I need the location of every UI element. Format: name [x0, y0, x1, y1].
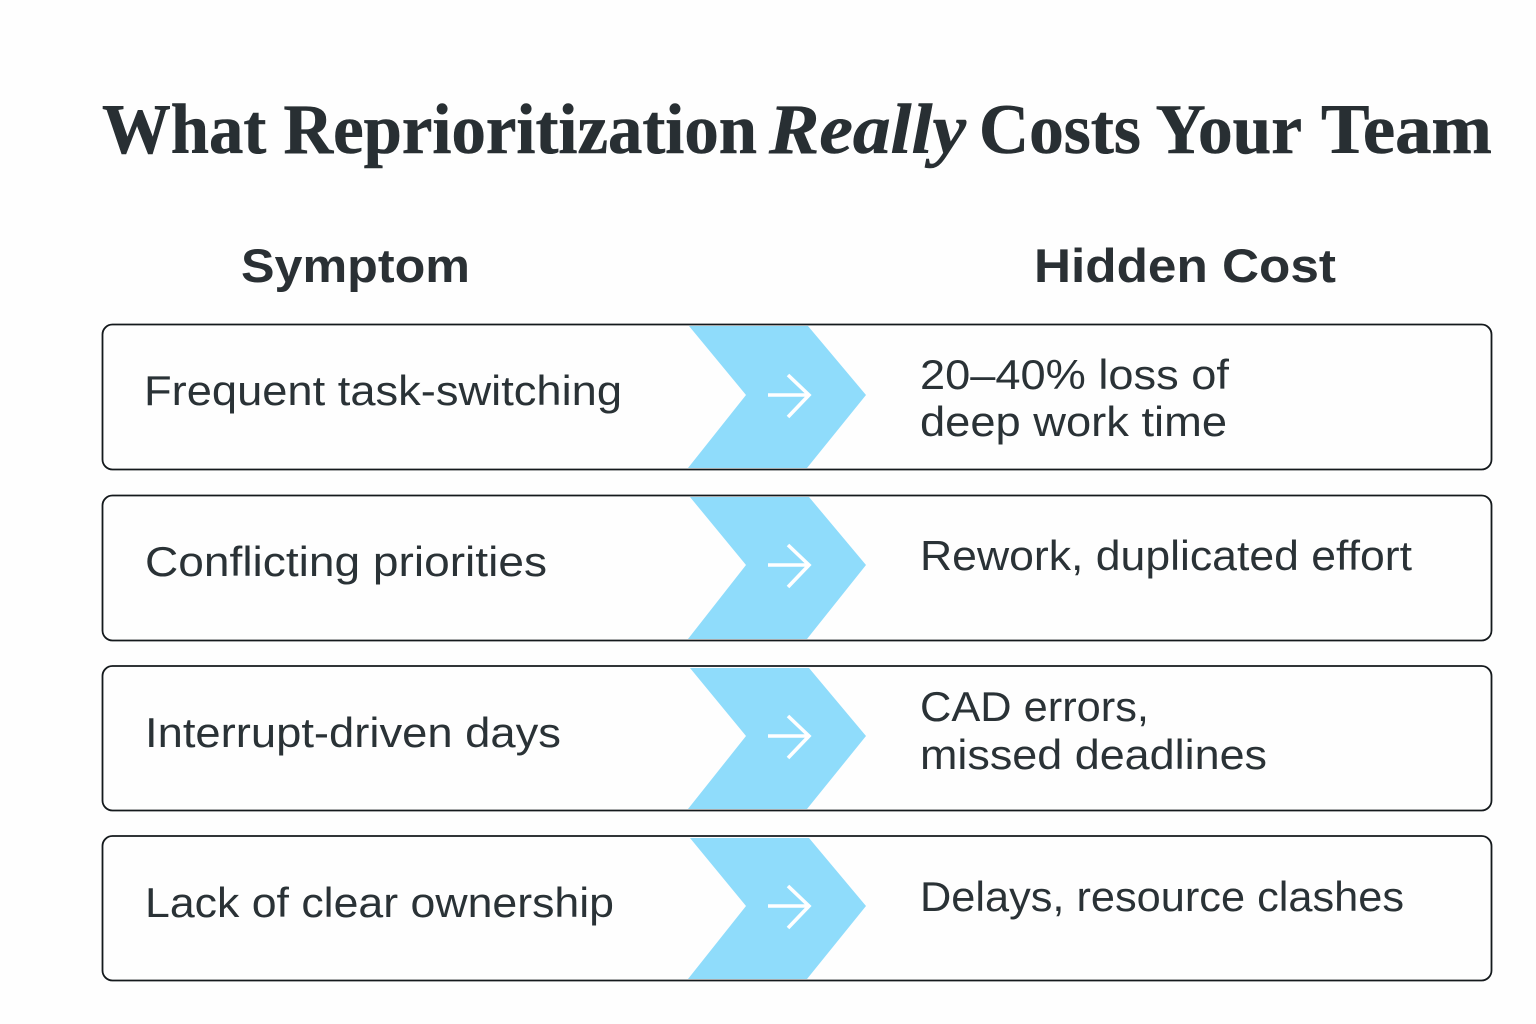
symptom: row 4: Lack of clear ownership: [145, 879, 614, 926]
icon: arrow row 3: [768, 716, 809, 758]
icon: arrow row 2: [768, 545, 809, 587]
icon: arrow row 4: [768, 886, 809, 928]
chevron: row 3: [688, 668, 866, 809]
hidden cost: row 1: [920, 351, 1229, 445]
chevron: row 4: [688, 838, 866, 979]
hidden cost: row 4: Delays, resource clashes: [920, 873, 1404, 920]
hidden cost: row 3: [920, 683, 1267, 778]
chevron: row 1: [688, 326, 866, 468]
panel: row 4: [102, 836, 1492, 980]
hidden cost: row 1: deep work time: [920, 398, 1227, 445]
chevron: row 2: [688, 497, 866, 639]
heading: Hidden Cost: Hidden Cost: [1034, 239, 1336, 292]
hidden cost: row 3: missed deadlines: [920, 731, 1267, 778]
title: Costs Your: [979, 91, 1302, 169]
title: Team: [1321, 91, 1492, 169]
title: Really: [768, 91, 967, 169]
symptom: row 3: Interrupt-driven days: [145, 709, 561, 756]
panel: row 1: [102, 324, 1492, 470]
symptom: row 2: Conflicting priorities: [145, 538, 547, 585]
panel: row 2: [102, 496, 1492, 640]
hidden cost: row 3: CAD errors,: [920, 683, 1149, 730]
panel: row 3: [102, 666, 1492, 810]
title: [102, 91, 1492, 169]
heading: Symptom: Symptom: [241, 239, 470, 292]
title: What Reprioritization: [102, 91, 757, 169]
symptom: row 1: Frequent task-switching: [144, 367, 622, 414]
hidden cost: row 2: Rework, duplicated effort: [920, 532, 1412, 579]
icon: arrow row 1: [768, 375, 809, 417]
hidden cost: row 1: 20–40% loss of: [920, 351, 1229, 398]
